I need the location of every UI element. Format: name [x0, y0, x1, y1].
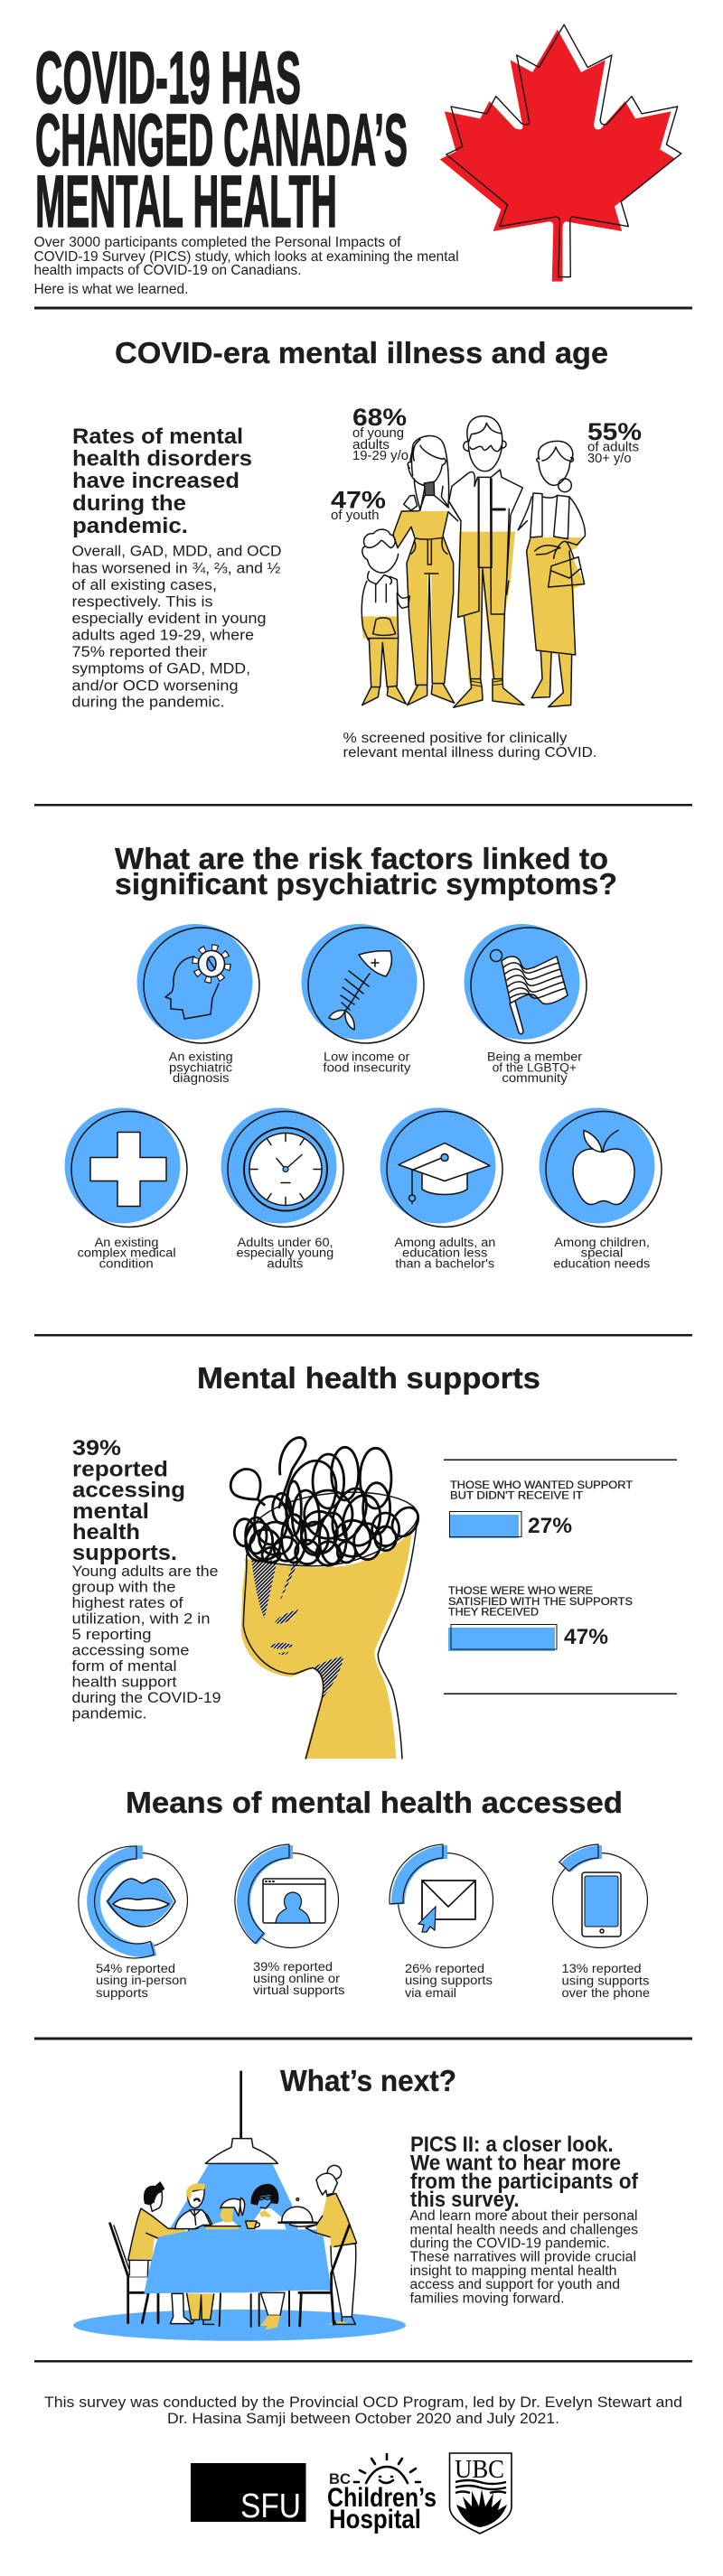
cloche dish	[278, 2198, 318, 2226]
icon: flag	[465, 924, 587, 1043]
stat: 55% adults: 55%	[587, 418, 642, 445]
label: email: 26% reported	[405, 1962, 484, 1975]
label: special education	[553, 1236, 651, 1270]
subheading: 39%: health	[72, 1520, 140, 1545]
PICS II body text: during the COVID-19 pandemic.	[410, 2236, 610, 2251]
stat: satisfied with supports: 47%	[564, 1625, 608, 1649]
logo: UBC shield	[450, 2453, 512, 2534]
body text: worsening: Overall, GAD, MDD, and OCD	[72, 544, 282, 560]
label: LGBTQ+	[487, 1050, 583, 1085]
label: online or virtual: virtual supports	[253, 1983, 345, 1997]
logo: UBC shield: UBC	[455, 2455, 504, 2484]
stat: satisfied with supports: THOSE WERE WHO WERE	[448, 1584, 593, 1597]
label: medical condition: An existing	[95, 1236, 158, 1249]
body text: young adults: utilization, with 2 in	[72, 1611, 210, 1628]
stat: wanted support but did not receive: BUT DIDN'T RECEIVE IT	[450, 1489, 584, 1501]
label: special education: education needs	[553, 1256, 651, 1270]
label: email: via email	[405, 1986, 456, 2000]
label: adults under 60: Adults under 60,	[238, 1236, 333, 1249]
label: medical condition: complex medical	[78, 1246, 176, 1260]
figure: boy	[362, 529, 409, 705]
label: low income	[323, 1050, 411, 1074]
PICS II body text: And learn more about their personal	[410, 2208, 638, 2224]
body text: young adults: health support	[72, 1675, 177, 1691]
icon: email ring 26%	[390, 1844, 493, 1947]
body text: worsening: adults aged 19-29, where	[72, 628, 254, 644]
intro text	[34, 235, 459, 297]
subheading: rates increased: health disorders	[72, 446, 252, 471]
heading: what's next: What’s next?	[280, 2064, 456, 2097]
icon: phone ring 13%	[553, 1844, 647, 1947]
body text: young adults	[72, 1563, 221, 1722]
heading: risk factors	[115, 842, 617, 901]
body text: worsening: of all existing cases,	[72, 577, 217, 593]
caption: screened positive	[343, 731, 596, 761]
body text: worsening: respectively. This is	[72, 593, 213, 610]
label: education: than a bachelor's	[395, 1256, 494, 1270]
stat: 55% adults	[587, 418, 642, 466]
illustration: family with yellow fill levels	[361, 416, 585, 707]
stat: satisfied with supports	[448, 1584, 633, 1651]
stat: satisfied with supports: THEY RECEIVED	[448, 1606, 539, 1619]
label: psychiatric diagnosis: diagnosis	[173, 1071, 230, 1085]
intro text: Here is what we learned.	[34, 282, 189, 297]
label: email	[405, 1962, 493, 2000]
body text: young adults: form of mental	[72, 1658, 177, 1675]
body text: worsening: especially evident in young	[72, 611, 266, 627]
icon: clock	[221, 1107, 343, 1227]
stat: 68% young adults: adults	[352, 438, 390, 453]
label: education	[394, 1236, 495, 1270]
label: LGBTQ+: community	[502, 1071, 568, 1085]
heading: risk factors: significant psychiatric symptoms?	[115, 867, 617, 901]
PICS II heading: We want to hear more	[410, 2151, 621, 2175]
label: adults under 60: especially young	[237, 1246, 333, 1260]
diner: father	[174, 2183, 212, 2229]
label: phone: over the phone	[562, 1986, 650, 2000]
stat: wanted support but did not receive	[449, 1479, 634, 1538]
left chair	[110, 2224, 158, 2323]
label: adults under 60	[237, 1236, 333, 1270]
PICS II body text: mental health needs and challenges	[410, 2222, 638, 2237]
stat: wanted support but did not receive: THOSE WHO WANTED SUPPORT	[450, 1479, 634, 1491]
subheading: rates increased	[72, 425, 252, 538]
label: psychiatric diagnosis: An existing	[169, 1050, 233, 1064]
subheading: 39%	[72, 1436, 185, 1565]
illustration: head with tangled scribble	[230, 1438, 424, 1759]
PICS II heading: PICS II: a closer look.	[410, 2133, 614, 2157]
label: online or virtual: 39% reported	[253, 1960, 333, 1974]
heading: mental health supports: Mental health supports	[197, 1361, 540, 1395]
label: online or virtual: using online or	[253, 1972, 341, 1985]
title: MENTAL HEALTH	[35, 161, 337, 243]
stat: 68% young adults: 68%	[352, 404, 407, 431]
body text: young adults: pandemic.	[72, 1705, 146, 1722]
figure: man	[449, 416, 527, 707]
stat: 47% youth: of youth	[331, 509, 380, 523]
logo: SFU	[191, 2463, 305, 2525]
figure: young woman	[393, 435, 458, 705]
footer credit text	[44, 2394, 682, 2427]
subheading: rates increased: Rates of mental	[72, 425, 243, 449]
lamp	[205, 2071, 277, 2163]
body text: worsening: during the pandemic.	[72, 695, 224, 711]
logo: BC Children's Hospital: BC	[329, 2470, 351, 2487]
stat: satisfied with supports: SATISFIED WITH THE SUPPORTS	[448, 1595, 633, 1608]
scribble	[230, 1438, 424, 1565]
icon: fish bone	[302, 924, 424, 1043]
label: special education: special	[581, 1246, 623, 1260]
logo: SFU: SFU	[240, 2487, 301, 2525]
body text: worsening: 75% reported their	[72, 644, 208, 660]
label: medical condition	[78, 1236, 176, 1270]
intro text: health impacts of COVID-19 on Canadians.	[34, 263, 302, 278]
table	[144, 2229, 332, 2293]
icon: graduation cap	[380, 1107, 502, 1227]
stat: 47% youth	[331, 486, 386, 523]
PICS II body text: access and support for youth and	[410, 2277, 620, 2292]
PICS II body text: insight to mapping mental health	[410, 2263, 616, 2279]
PICS II body text: families moving forward.	[410, 2291, 564, 2306]
label: education: education less	[402, 1246, 488, 1260]
label: in-person: supports	[96, 1986, 148, 2000]
icon: medical cross	[65, 1107, 187, 1227]
stat: 47% youth: 47%	[331, 486, 386, 513]
label: adults under 60: adults	[267, 1256, 304, 1270]
title: COVID-19 HAS	[35, 37, 301, 119]
label: medical condition: condition	[99, 1256, 154, 1270]
label: psychiatric diagnosis: psychiatric	[169, 1060, 232, 1074]
icon: maple leaf	[440, 24, 681, 282]
diner: child	[204, 2198, 245, 2229]
label: psychiatric diagnosis	[169, 1050, 233, 1085]
footer credit text: This survey was conducted by the Provincial OCD Program, led by Dr. Evelyn Stewart and	[44, 2394, 682, 2411]
server	[299, 2165, 357, 2326]
illustration: family at dinner table under a lamp	[73, 2071, 406, 2341]
subheading: rates increased: pandemic.	[72, 514, 188, 538]
footer credit text: Dr. Hasina Samji between October 2020 and July 2021.	[167, 2410, 559, 2427]
label: low income: food insecurity	[323, 1060, 411, 1074]
figure: older woman	[518, 441, 585, 707]
icon: apple	[539, 1107, 662, 1227]
icon: head with gear	[137, 924, 259, 1043]
logo: BC Children's Hospital	[327, 2454, 437, 2534]
PICS II heading: from the participants of	[410, 2170, 639, 2194]
stat: 68% young adults: of young	[352, 426, 404, 441]
heading: means of mental health accessed: Means of mental health accessed	[126, 1786, 623, 1819]
label: in-person	[96, 1962, 186, 2000]
subheading: 39%: mental	[72, 1499, 149, 1524]
label: online or virtual	[253, 1960, 345, 1997]
label: phone	[562, 1962, 650, 2000]
label: phone: 13% reported	[562, 1962, 642, 1975]
body text: young adults: highest rates of	[72, 1595, 183, 1611]
stat: 68% young adults	[352, 404, 408, 463]
subheading: 39%: supports.	[72, 1541, 177, 1565]
body text: worsening: and/or OCD worsening	[72, 677, 239, 694]
intro text: Over 3000 participants completed the Personal Impacts of	[34, 235, 401, 250]
PICS II body text	[410, 2208, 638, 2306]
body text: worsening: has worsened in ¾, ⅔, and ½	[72, 560, 281, 576]
icon: video call ring 39%	[235, 1844, 338, 1947]
caption: screened positive: % screened positive for clinically	[343, 731, 568, 746]
diner: left man	[128, 2181, 198, 2277]
intro text: COVID-19 Survey (PICS) study, which looks at examining the mental	[34, 249, 459, 265]
stat: 55% adults: of adults	[587, 441, 639, 455]
stat: 68% young adults: 19-29 y/o	[352, 449, 408, 463]
body text: young adults: during the COVID-19	[72, 1690, 221, 1706]
body text: young adults: accessing some	[72, 1642, 190, 1658]
PICS II heading: this survey.	[410, 2188, 519, 2212]
body text: young adults: group with the	[72, 1579, 175, 1595]
title	[35, 37, 408, 243]
diner: woman with glasses	[246, 2184, 286, 2229]
label: email: using supports	[405, 1974, 493, 1987]
label: LGBTQ+: of the LGBTQ+	[493, 1060, 577, 1074]
label: phone: using supports	[562, 1974, 650, 1987]
subheading: 39%: accessing	[72, 1479, 185, 1503]
logo: BC Children's Hospital: Children’s	[327, 2483, 437, 2513]
caption: screened positive: relevant mental illness during COVID.	[343, 745, 596, 761]
logo: BC Children's Hospital: Hospital	[329, 2505, 421, 2534]
icon: lips ring 54%	[79, 1845, 188, 1958]
heading: risk factors: What are the risk factors linked to	[115, 842, 608, 875]
subheading: rates increased: have increased	[72, 469, 239, 493]
body text: young adults: 5 reporting	[72, 1627, 152, 1643]
PICS II heading	[410, 2133, 639, 2212]
stat: 55% adults: 30+ y/o	[587, 452, 631, 466]
label: LGBTQ+: Being a member	[487, 1050, 583, 1064]
subheading: 39%: 39%	[72, 1436, 121, 1461]
subheading: 39%: reported	[72, 1457, 168, 1481]
body text: worsening	[72, 544, 282, 711]
PICS II body text: These narratives will provide crucial	[410, 2250, 636, 2265]
label: low income: Low income or	[324, 1050, 410, 1064]
label: in-person: using in-person	[96, 1974, 186, 1987]
subheading: rates increased: during the	[72, 491, 186, 516]
body text: young adults: Young adults are the	[72, 1563, 219, 1580]
label: in-person: 54% reported	[96, 1962, 175, 1975]
heading: COVID-era mental illness and age: COVID-era mental illness and age	[115, 336, 608, 369]
label: special education: Among children,	[554, 1236, 650, 1249]
label: education: Among adults, an	[394, 1236, 495, 1249]
stat: wanted support but did not receive: 27%	[528, 1514, 572, 1538]
body text: worsening: symptoms of GAD, MDD,	[72, 661, 250, 677]
legs under the table	[170, 2291, 289, 2329]
